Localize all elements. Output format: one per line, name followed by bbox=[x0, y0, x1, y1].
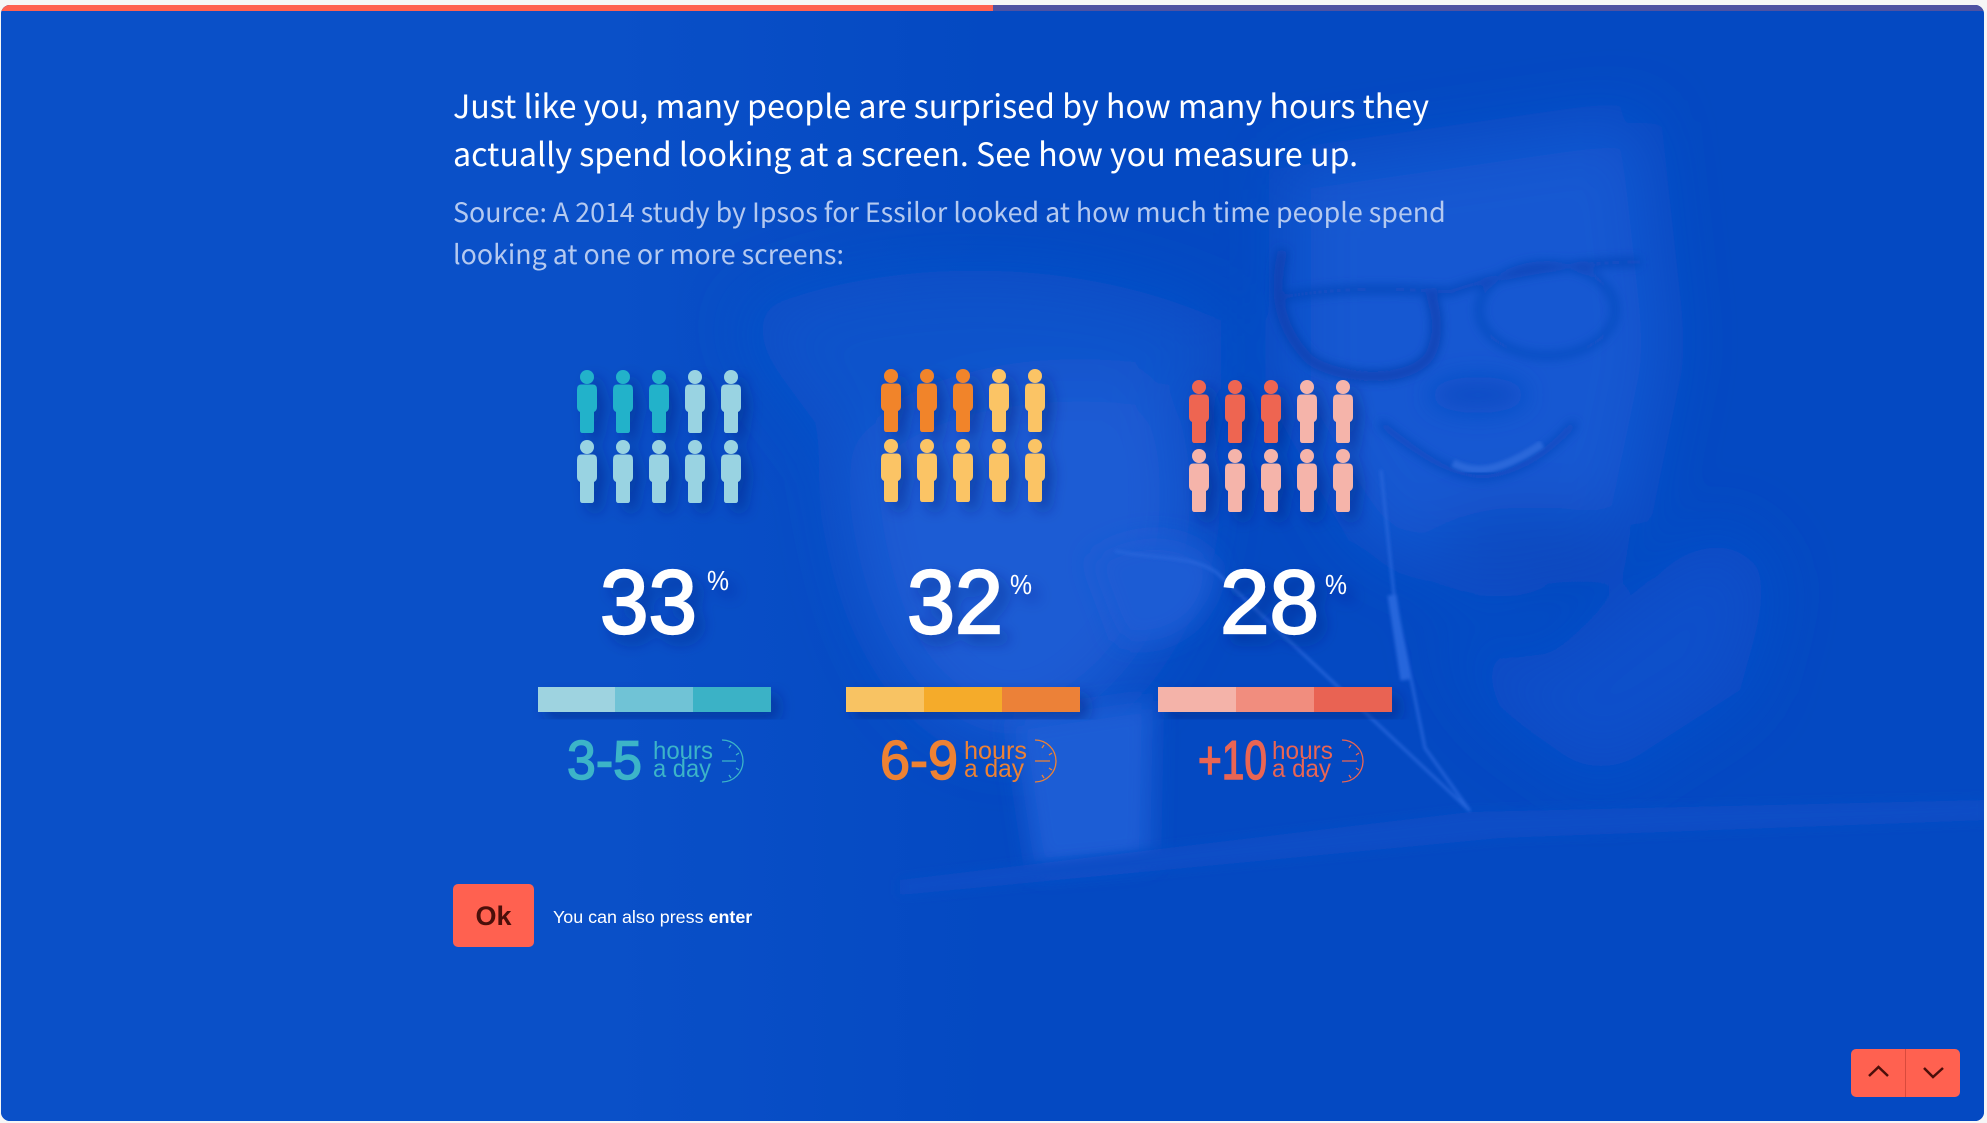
label: 6-9 hours a day: hours bbox=[964, 737, 1027, 765]
label: +10 hours a day: a day bbox=[1272, 755, 1331, 783]
source text bbox=[453, 191, 1446, 272]
icon: ten people, three highlighted red bbox=[1189, 380, 1353, 512]
label: 3-5 hours a day bbox=[567, 729, 743, 791]
hint: press enter: You can also press enter bbox=[553, 907, 752, 927]
button: Ok bbox=[453, 884, 534, 947]
icon: clock bbox=[722, 740, 743, 782]
label: 3-5 hours a day: hours bbox=[653, 737, 713, 765]
navigation buttons bbox=[1851, 1049, 1960, 1097]
bar: three orange segments bbox=[846, 687, 1080, 712]
column: 32% 6-9 hours a day bbox=[846, 369, 1080, 791]
column: 33% 3-5 hours a day bbox=[538, 370, 771, 791]
number: 33 percent: 33 bbox=[600, 553, 697, 653]
heading bbox=[453, 82, 1429, 176]
source text: Source: A 2014 study by Ipsos for Essilor looked at how much time people spend bbox=[453, 191, 1446, 230]
number: 33 percent: % bbox=[707, 565, 729, 596]
icon: down arrow bbox=[1923, 1067, 1944, 1079]
label: 6-9 hours a day: a day bbox=[964, 755, 1024, 783]
label: 3-5 hours a day: 3-5 bbox=[567, 729, 642, 791]
heading: Just like you, many people are surprised by how many hours they bbox=[453, 82, 1429, 128]
bar: three red segments bbox=[1158, 687, 1392, 712]
label: 6-9 hours a day bbox=[880, 729, 1056, 791]
column: 28% +10 hours a day bbox=[1158, 380, 1392, 791]
label: +10 hours a day: hours bbox=[1272, 737, 1333, 765]
label: +10 hours a day bbox=[1198, 729, 1363, 791]
heading: actually spend looking at a screen. See how you measure up. bbox=[453, 130, 1358, 176]
source text: looking at one or more screens: bbox=[453, 233, 844, 272]
icon: clock bbox=[1035, 740, 1056, 782]
progress bar bbox=[0, 5, 1987, 11]
divider bbox=[1905, 1049, 1906, 1097]
label: 6-9 hours a day: 6-9 bbox=[880, 729, 958, 791]
icon: up arrow bbox=[1868, 1065, 1889, 1077]
icon: clock bbox=[1342, 740, 1363, 782]
label: 3-5 hours a day: a day bbox=[653, 755, 711, 783]
number: 32 percent: 32 bbox=[907, 553, 1003, 653]
number: 28 percent: % bbox=[1325, 569, 1347, 600]
progress bar: filled part bbox=[0, 5, 993, 11]
label: +10 hours a day: +10 bbox=[1198, 729, 1267, 791]
number: 28 percent: 28 bbox=[1220, 553, 1319, 653]
bar: three teal segments bbox=[538, 687, 771, 712]
button: Ok: Ok bbox=[475, 901, 512, 931]
icon: ten people, three highlighted teal bbox=[577, 370, 741, 503]
number: 32 percent: % bbox=[1010, 569, 1032, 600]
icon: ten people, three highlighted orange bbox=[881, 369, 1045, 502]
